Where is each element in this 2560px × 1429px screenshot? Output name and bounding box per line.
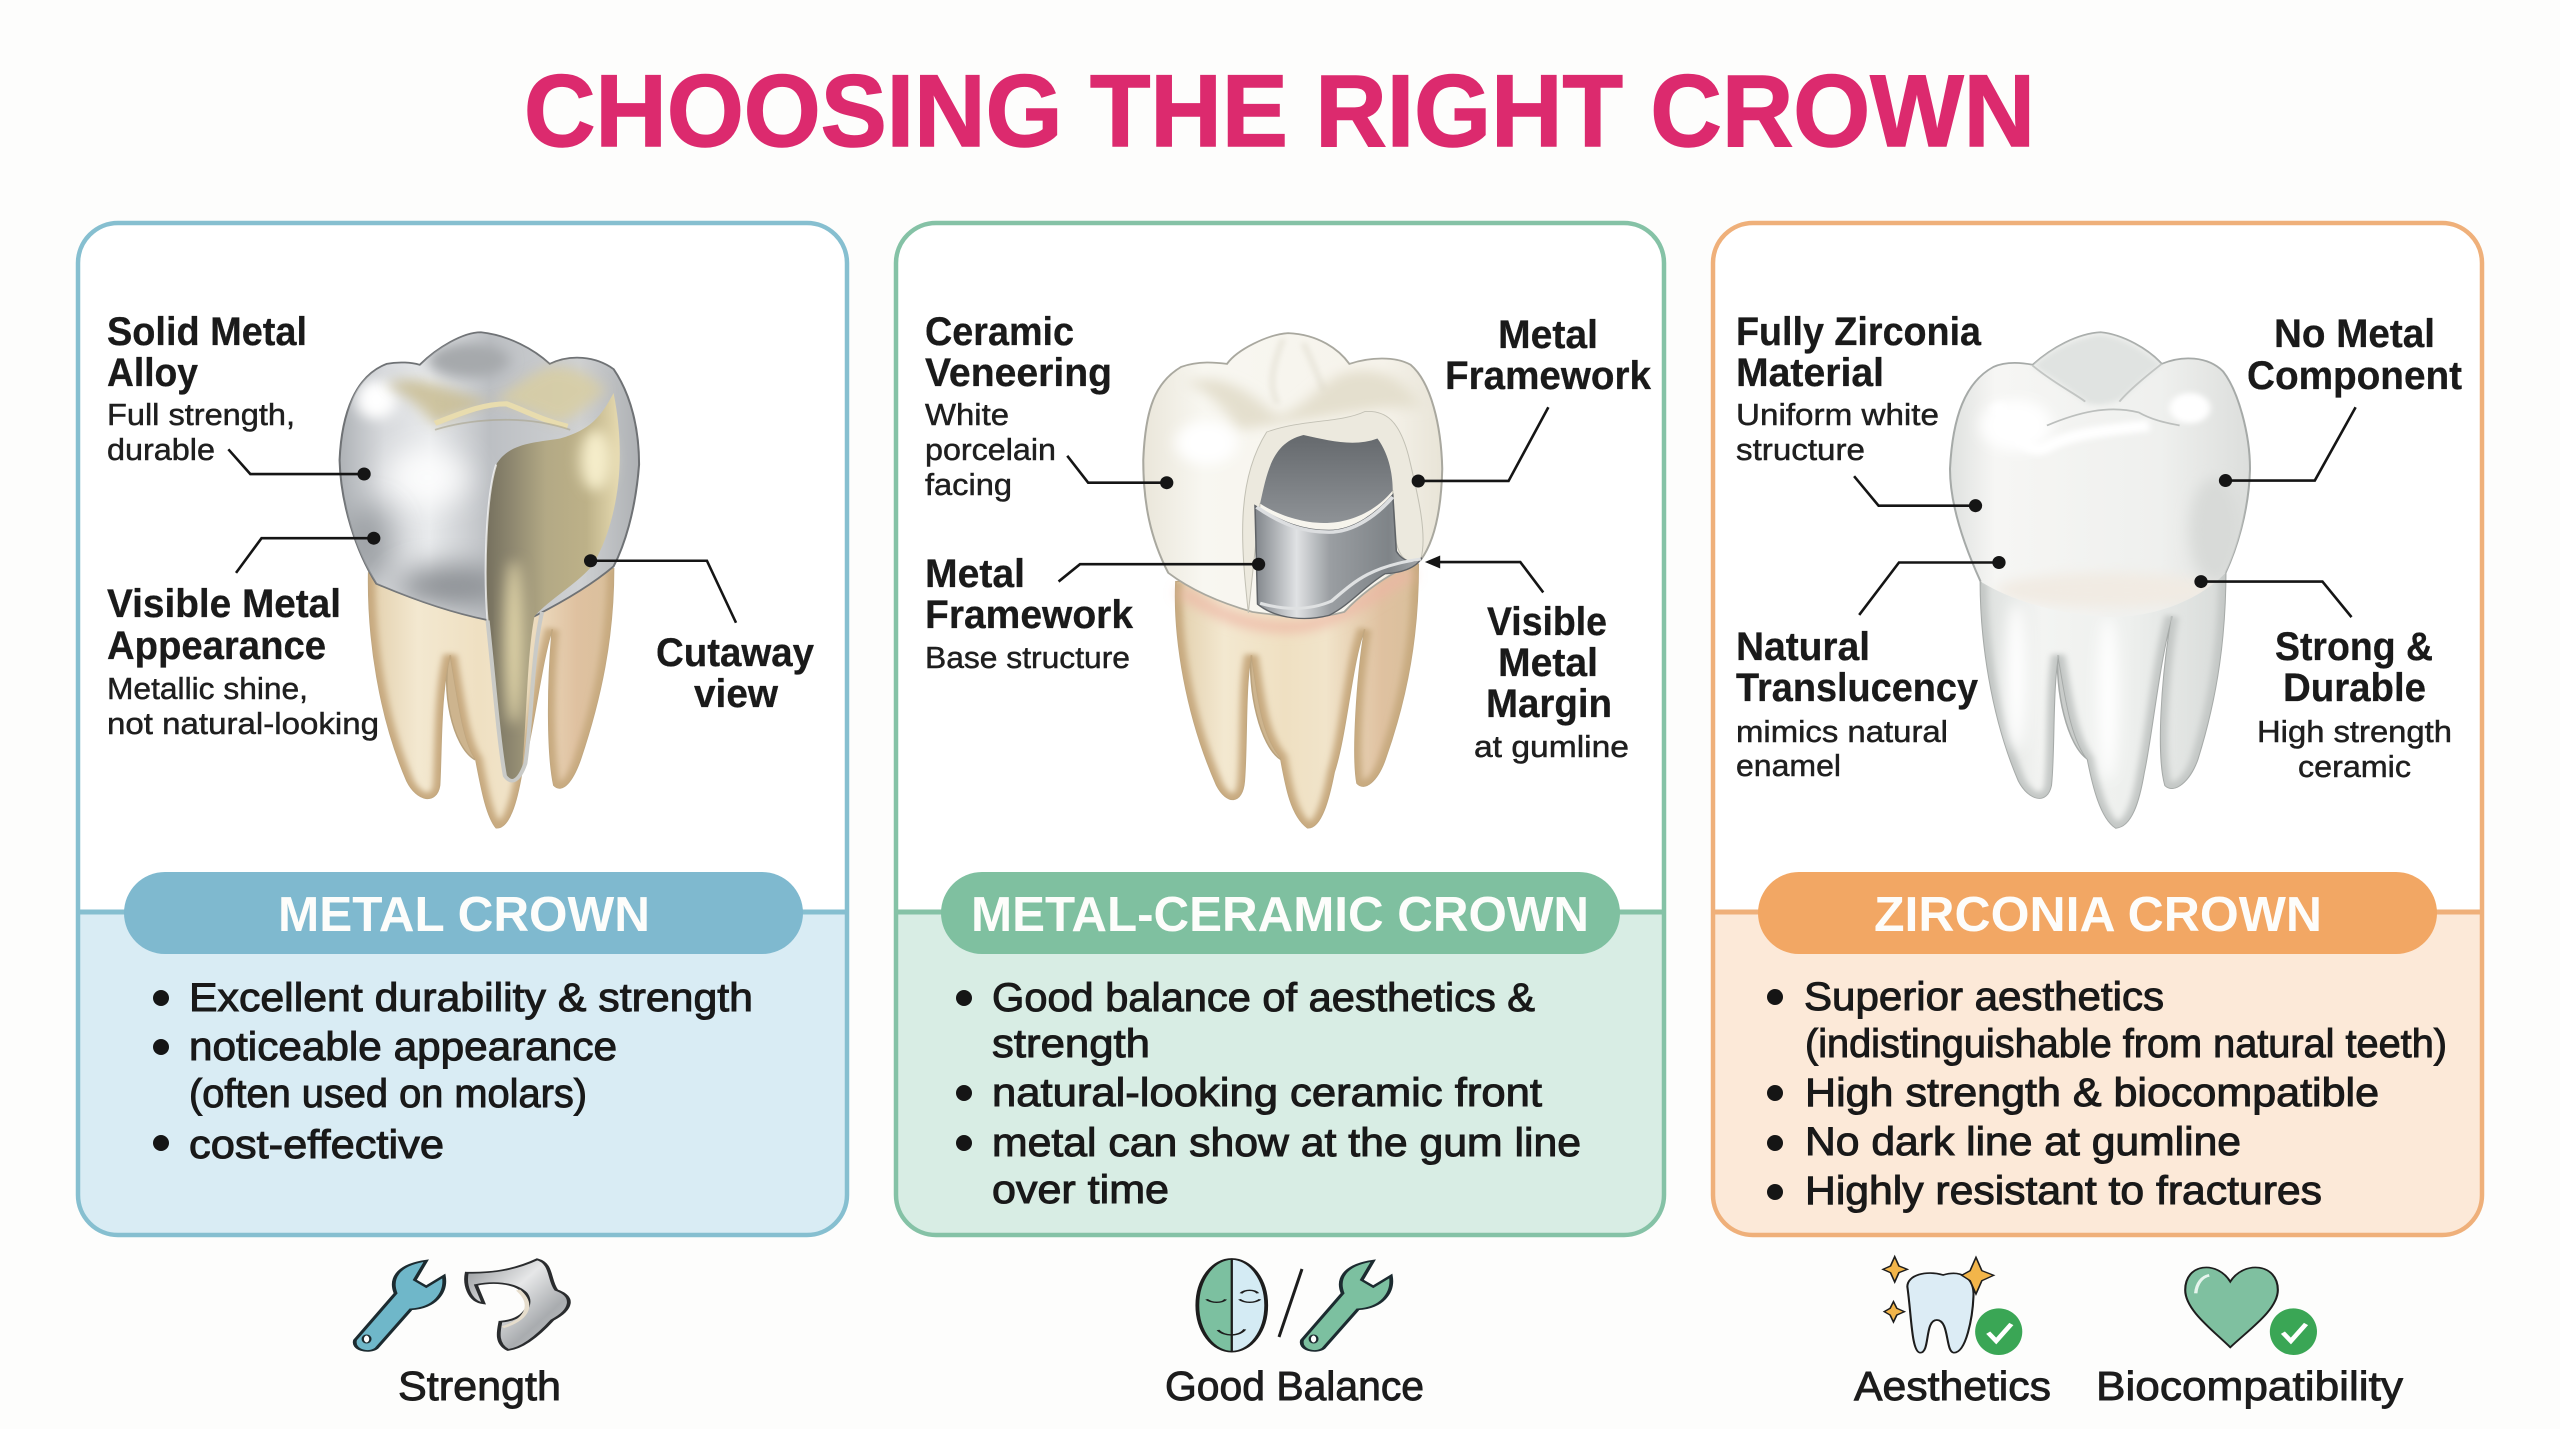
panel: metal-ceramic crown	[896, 223, 1664, 1235]
label: visible metal margin: Visible	[1487, 600, 1607, 644]
label: solid metal alloy: durable	[107, 432, 215, 467]
bullet list: metal-ceramic crown	[956, 976, 1581, 1212]
bullet list: metal crown: (often used on molars)	[189, 1072, 587, 1116]
illustration: cutaway metal crown tooth	[340, 332, 639, 828]
bullet list: zirconia crown: Superior aesthetics	[1804, 975, 2164, 1019]
name pill: metal-ceramic crown: METAL-CERAMIC CROWN	[971, 888, 1589, 942]
caption: biocompatibility: Biocompatibility	[2096, 1363, 2404, 1409]
bullet list: metal-ceramic crown: over time	[992, 1168, 1169, 1212]
label: visible metal margin: Margin	[1486, 682, 1612, 726]
bullet list: zirconia crown: Highly resistant to fractures	[1805, 1169, 2322, 1213]
panel background	[896, 223, 1664, 1235]
label: fully zirconia material: Material	[1736, 351, 1884, 395]
label: natural translucency: Natural	[1736, 625, 1870, 669]
panel background	[1713, 223, 2482, 1235]
bullet list: metal crown	[153, 976, 753, 1167]
label: solid metal alloy	[107, 310, 307, 467]
bullet list: metal-ceramic crown: Good balance of aesthetics &	[992, 976, 1535, 1020]
title: CHOOSING THE RIGHT CROWN	[524, 54, 2035, 168]
bullet list: zirconia crown: No dark line at gumline	[1805, 1120, 2241, 1164]
label: cutaway view: view	[694, 672, 779, 716]
label: cutaway view: Cutaway	[656, 631, 815, 675]
footer item: good balance	[1165, 1259, 1424, 1409]
bullet list: metal crown: noticeable appearance	[189, 1025, 617, 1069]
label: metal framework right: Metal	[1498, 313, 1598, 357]
callouts: metal crown	[228, 449, 736, 623]
caption: aesthetics: Aesthetics	[1854, 1363, 2051, 1409]
label: strong and durable: ceramic	[2298, 749, 2411, 784]
bullet list: zirconia crown	[1767, 975, 2447, 1213]
label: visible metal margin: Metal	[1498, 641, 1598, 685]
label: natural translucency: mimics natural	[1736, 714, 1948, 749]
bullet list: metal crown: Excellent durability & strength	[189, 976, 753, 1020]
label: natural translucency: Translucency	[1736, 666, 1979, 710]
label: natural translucency	[1736, 625, 1979, 783]
label: metal framework left: Framework	[925, 593, 1134, 637]
illustration: zirconia crown tooth	[1950, 332, 2250, 828]
label: ceramic veneering: porcelain	[925, 432, 1056, 467]
callouts: zirconia crown	[1854, 407, 2356, 617]
label: ceramic veneering: Veneering	[925, 351, 1112, 395]
label: fully zirconia material: Fully Zirconia	[1736, 310, 1982, 354]
label: cutaway view	[656, 631, 815, 716]
icon: blue wrench	[355, 1261, 444, 1351]
label: strong and durable: High strength	[2257, 714, 2452, 749]
label: ceramic veneering: White	[925, 397, 1009, 432]
panel: metal crown	[78, 223, 847, 1235]
label: strong and durable	[2257, 625, 2452, 784]
label: visible metal appearance: Appearance	[107, 624, 326, 668]
label: ceramic veneering	[925, 310, 1112, 502]
label: no metal component	[2247, 312, 2462, 398]
bullet list: zirconia crown: High strength & biocompatible	[1805, 1071, 2379, 1115]
icon: slash	[1279, 1269, 1302, 1337]
label: metal framework left: Metal	[925, 552, 1025, 596]
label: strong and durable: Strong &	[2275, 625, 2433, 669]
footer item: aesthetics	[1854, 1257, 2051, 1409]
label: solid metal alloy: Alloy	[107, 351, 199, 395]
label: visible metal appearance: Metallic shine,	[107, 671, 308, 706]
label: visible metal appearance	[107, 582, 379, 741]
name pill: metal crown: METAL CROWN	[278, 888, 650, 942]
bullet list: metal-ceramic crown: metal can show at the gum line	[992, 1121, 1581, 1165]
name pill: zirconia crown: ZIRCONIA CROWN	[1874, 888, 2322, 942]
label: metal framework right	[1445, 313, 1652, 398]
label: fully zirconia material: structure	[1736, 432, 1865, 467]
caption: good balance: Good Balance	[1165, 1363, 1424, 1409]
label: strong and durable: Durable	[2283, 666, 2426, 710]
bullet list: zirconia crown: (indistinguishable from natural teeth)	[1805, 1022, 2447, 1066]
label: visible metal margin	[1474, 600, 1629, 764]
label: metal framework left	[925, 552, 1134, 675]
label: fully zirconia material: Uniform white	[1736, 397, 1939, 432]
illustration: metal-ceramic crown tooth	[1143, 333, 1442, 828]
icon: metal crown piece	[466, 1259, 569, 1350]
label: no metal component: Component	[2247, 354, 2462, 398]
footer item: strength	[355, 1259, 569, 1409]
label: visible metal appearance: Visible Metal	[107, 582, 341, 626]
label: no metal component: No Metal	[2274, 312, 2435, 356]
icon: half face mask	[1197, 1259, 1267, 1352]
label: natural translucency: enamel	[1736, 748, 1841, 783]
footer item: biocompatibility	[2096, 1267, 2404, 1409]
label: ceramic veneering: Ceramic	[925, 310, 1074, 354]
label: solid metal alloy: Solid Metal	[107, 310, 307, 354]
bullet list: metal crown: cost-effective	[189, 1123, 444, 1167]
label: metal framework right: Framework	[1445, 354, 1652, 398]
label: solid metal alloy: Full strength,	[107, 397, 295, 432]
icon: green wrench	[1302, 1261, 1391, 1351]
bullet list: metal-ceramic crown: natural-looking ceramic front	[992, 1071, 1542, 1115]
name pill: metal crown	[124, 872, 803, 954]
label: visible metal appearance: not natural-looking	[107, 706, 379, 741]
icon: heart with check	[2185, 1267, 2317, 1355]
panel background	[78, 223, 847, 1235]
name pill: zirconia crown	[1758, 872, 2437, 954]
panel: zirconia crown	[1713, 223, 2482, 1235]
icon: sparkling tooth with check	[1883, 1257, 2022, 1355]
callouts: metal-ceramic crown	[1059, 407, 1548, 592]
label: metal framework left: Base structure	[925, 640, 1130, 675]
label: fully zirconia material	[1736, 310, 1982, 467]
name pill: metal-ceramic crown	[941, 872, 1620, 954]
label: ceramic veneering: facing	[925, 467, 1012, 502]
bullet list: metal-ceramic crown: strength	[992, 1022, 1150, 1066]
label: visible metal margin: at gumline	[1474, 729, 1629, 764]
caption: strength: Strength	[398, 1363, 561, 1409]
